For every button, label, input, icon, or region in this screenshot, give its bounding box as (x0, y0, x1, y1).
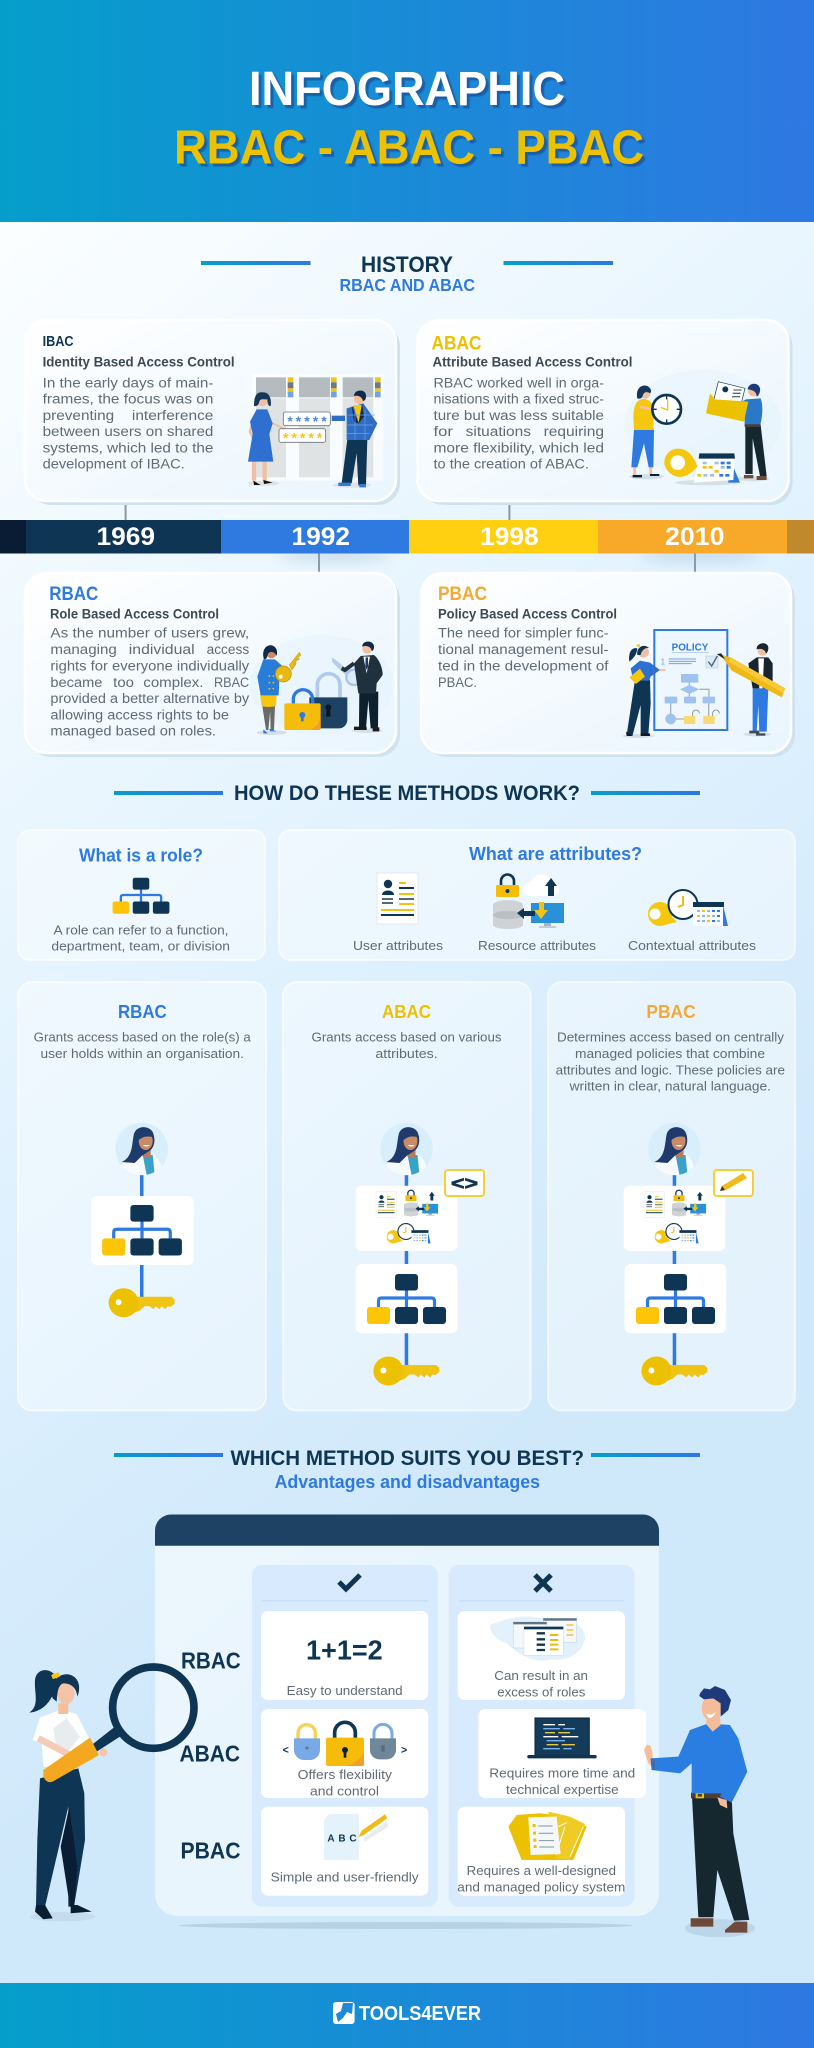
panel: what are attributes: Resource attributes (478, 938, 597, 953)
icon: padlocks: > (401, 1745, 407, 1757)
text: IBAC description: interference (132, 408, 213, 423)
heading: history (201, 252, 613, 295)
text: IBAC description: systems, which led to the (43, 440, 213, 455)
cell: well-designed policy system (457, 1807, 625, 1896)
panel: what are attributes (279, 830, 795, 960)
card: IBAC (25, 320, 400, 505)
text: ABAC description: nisations with a fixed struc- (434, 392, 604, 407)
cell: excess of roles: excess of roles (497, 1684, 586, 1699)
text: ABAC description: ture but was less suitable (434, 408, 604, 423)
badge: code (445, 1170, 484, 1196)
column: disadvantages (449, 1565, 634, 1907)
text: RBAC description: became (50, 675, 102, 690)
timeline years: 1992 (292, 523, 350, 551)
cell: flexibility and control (261, 1709, 428, 1798)
heading: history: RBAC AND ABAC (340, 275, 475, 295)
panel: RBAC method: RBAC (118, 1001, 167, 1022)
card: ABAC: Attribute Based Access Control (432, 355, 632, 370)
panel: PBAC method (548, 982, 795, 1410)
illustration: people with clock, folder, pin and calendar (625, 370, 782, 485)
badge: code: <> (451, 1174, 478, 1194)
panel: RBAC method: user holds within an organisation. (40, 1046, 244, 1061)
panel: RBAC method: Grants access based on the role(s) a (34, 1030, 251, 1045)
badge: pencil (714, 1170, 753, 1196)
text: ABAC description: more flexibility, which led (434, 440, 604, 455)
illustration: man gesturing at table (644, 1686, 755, 1937)
panel: what are attributes: What are attributes? (469, 843, 642, 864)
card: IBAC: IBAC (43, 334, 74, 350)
panel: what is a role: A role can refer to a function, (54, 922, 228, 937)
panel: ABAC method: ABAC (382, 1001, 431, 1022)
connectors: timeline to cards (125, 505, 696, 574)
panel: comparison table (155, 1514, 659, 1929)
text: PBAC description: The need for simpler func- (438, 626, 608, 641)
text: ABAC description: RBAC worked well in orga- (434, 375, 604, 390)
flow: user to role to key (91, 1123, 194, 1317)
text: IBAC description: frames, the focus was on (43, 392, 213, 407)
cell: easy to understand: 1+1=2 (306, 1634, 383, 1665)
heading: which method suits you best: Advantages and disadvantages (275, 1472, 540, 1492)
icon: ABC page with pencil: ABC (327, 1834, 357, 1845)
panel: ABAC method: Grants access based on various (312, 1030, 502, 1045)
panel: PBAC method: attributes and logic. These policies are (556, 1062, 785, 1078)
illustration: people with keys and padlocks (250, 635, 393, 735)
panel: PBAC method: PBAC (646, 1001, 696, 1022)
header banner (0, 0, 814, 222)
panel: what is a role (18, 830, 265, 960)
illustration: server room with two people and passwords: ***** (283, 430, 323, 446)
heading: how do these methods work (114, 781, 700, 805)
text: RBAC description: As the number of users grew, (50, 626, 249, 641)
flow: user to attributes to role to key (356, 1123, 484, 1386)
card: PBAC (421, 573, 795, 757)
text: PBAC description: PBAC. (438, 675, 477, 690)
text: RBAC description: complex. (143, 675, 204, 690)
icon: contextual attributes (648, 890, 728, 926)
heading: history: HISTORY (361, 252, 453, 277)
column: advantages (252, 1565, 438, 1907)
cell: flexibility and control: and control (310, 1783, 379, 1798)
footer banner: TOOLS4EVER (359, 2003, 481, 2025)
text: IBAC description: In the early days of main- (43, 375, 213, 390)
flow: user to policy attributes to role to key (624, 1123, 753, 1386)
row labels: RBAC (181, 1647, 241, 1673)
text: PBAC description (438, 626, 609, 690)
title: INFOGRAPHIC (249, 63, 565, 116)
card: RBAC (25, 573, 400, 757)
logo mark (333, 2002, 355, 2024)
text: RBAC description: rights for everyone individually (50, 658, 249, 674)
card: PBAC: Policy Based Access Control (438, 606, 617, 621)
cell: well-designed policy system: Requires a well-designed (467, 1863, 616, 1878)
panel: RBAC method (18, 982, 266, 1410)
icon: laptop with code (527, 1718, 597, 1758)
text: ABAC description: requiring (544, 424, 604, 439)
heading: which method suits you best: WHICH METHOD SUITS YOU BEST? (230, 1446, 584, 1470)
card: ABAC (418, 320, 792, 505)
panel: what is a role: department, team, or division (51, 939, 230, 954)
panel: ABAC method (283, 982, 531, 1410)
timeline years: 1969 (96, 523, 155, 551)
cell: easy to understand (261, 1611, 428, 1700)
card: ABAC: ABAC (432, 334, 482, 354)
panel: what is a role: What is a role? (79, 845, 203, 866)
timeline soft shadows (280, 550, 760, 562)
text: IBAC description: preventing (43, 408, 114, 423)
panel: PBAC method: Determines access based on centrally (557, 1030, 785, 1045)
text: ABAC description: for (434, 424, 454, 439)
icon: role windows (490, 1616, 585, 1661)
text: PBAC description: tional management resul- (438, 642, 608, 657)
row labels (180, 1647, 241, 1863)
heading: which method suits you best (114, 1446, 700, 1492)
heading: how do these methods work: HOW DO THESE METHODS WORK? (234, 781, 580, 805)
panel: what are attributes: Contextual attributes (628, 938, 757, 953)
illustration: policy document with two people: 1 (661, 658, 666, 667)
illustration: policy document with two people (622, 630, 785, 738)
cell: requires time and expertise: technical expertise (506, 1782, 619, 1797)
text: ABAC description: to the creation of ABAC. (434, 457, 589, 472)
text: PBAC description: ted in the development of (438, 658, 609, 674)
panel: PBAC method: managed policies that combine (575, 1046, 765, 1061)
timeline years: 1998 (480, 523, 539, 551)
text: IBAC description (43, 375, 213, 472)
cell: simple and user-friendly (261, 1807, 428, 1896)
illustration: server room with two people and passwords (248, 374, 383, 488)
title: RBAC - ABAC - PBAC (174, 122, 644, 174)
card: PBAC: PBAC (438, 584, 487, 605)
illustration: server room with two people and passwords: ***** (287, 413, 327, 429)
text: RBAC description: individual (129, 642, 195, 657)
illustration: policy document with two people: POLICY (672, 643, 709, 654)
text: RBAC description: allowing access rights to be (50, 707, 229, 722)
cell: requires time and expertise (478, 1709, 646, 1798)
card: RBAC: Role Based Access Control (50, 606, 219, 621)
footer banner (0, 1983, 814, 2048)
icon: org chart (113, 878, 169, 914)
icon: resource attributes (493, 874, 564, 929)
row labels: ABAC (180, 1741, 240, 1767)
icon: padlocks: < (283, 1745, 289, 1757)
text: RBAC description: RBAC (214, 675, 249, 690)
card: RBAC: RBAC (49, 584, 99, 605)
icon: folders with checklist (508, 1812, 587, 1860)
panel: PBAC method: written in clear, natural language. (569, 1079, 771, 1094)
text: ABAC description: situations (466, 424, 531, 439)
row labels: PBAC (180, 1837, 240, 1863)
text: IBAC description: between users on shared (43, 424, 213, 439)
timeline years: 2010 (665, 523, 724, 551)
title (174, 63, 644, 174)
text: RBAC description: managed based on roles. (50, 724, 216, 739)
cell: well-designed policy system: and managed policy system (457, 1880, 625, 1895)
panel: ABAC method: attributes. (375, 1046, 438, 1061)
cell: excess of roles: Can result in an (494, 1668, 588, 1683)
text: RBAC description: provided a better alternative by (50, 691, 249, 706)
timeline years (96, 523, 724, 551)
cell: flexibility and control: Offers flexibility (298, 1767, 393, 1782)
timeline bar (0, 520, 814, 554)
icon: user attributes (377, 873, 418, 924)
illustration: woman with magnifying glass (29, 1667, 194, 1921)
text: ABAC description (434, 375, 604, 472)
text: RBAC description: too (113, 675, 134, 690)
icon: ABC page with pencil (324, 1814, 388, 1860)
icon: padlocks (283, 1722, 407, 1766)
text: RBAC description: access (207, 642, 249, 657)
cell: requires time and expertise: Requires more time and (489, 1766, 635, 1781)
text: RBAC description (50, 626, 249, 739)
panel: what are attributes: User attributes (353, 938, 444, 953)
text: IBAC description: development of IBAC. (43, 457, 185, 472)
card: IBAC: Identity Based Access Control (43, 355, 235, 370)
text: RBAC description: managing (50, 642, 117, 657)
cell: easy to understand: Easy to understand (287, 1683, 403, 1698)
cell: excess of roles (458, 1611, 625, 1700)
cell: simple and user-friendly: Simple and user-friendly (271, 1870, 419, 1885)
